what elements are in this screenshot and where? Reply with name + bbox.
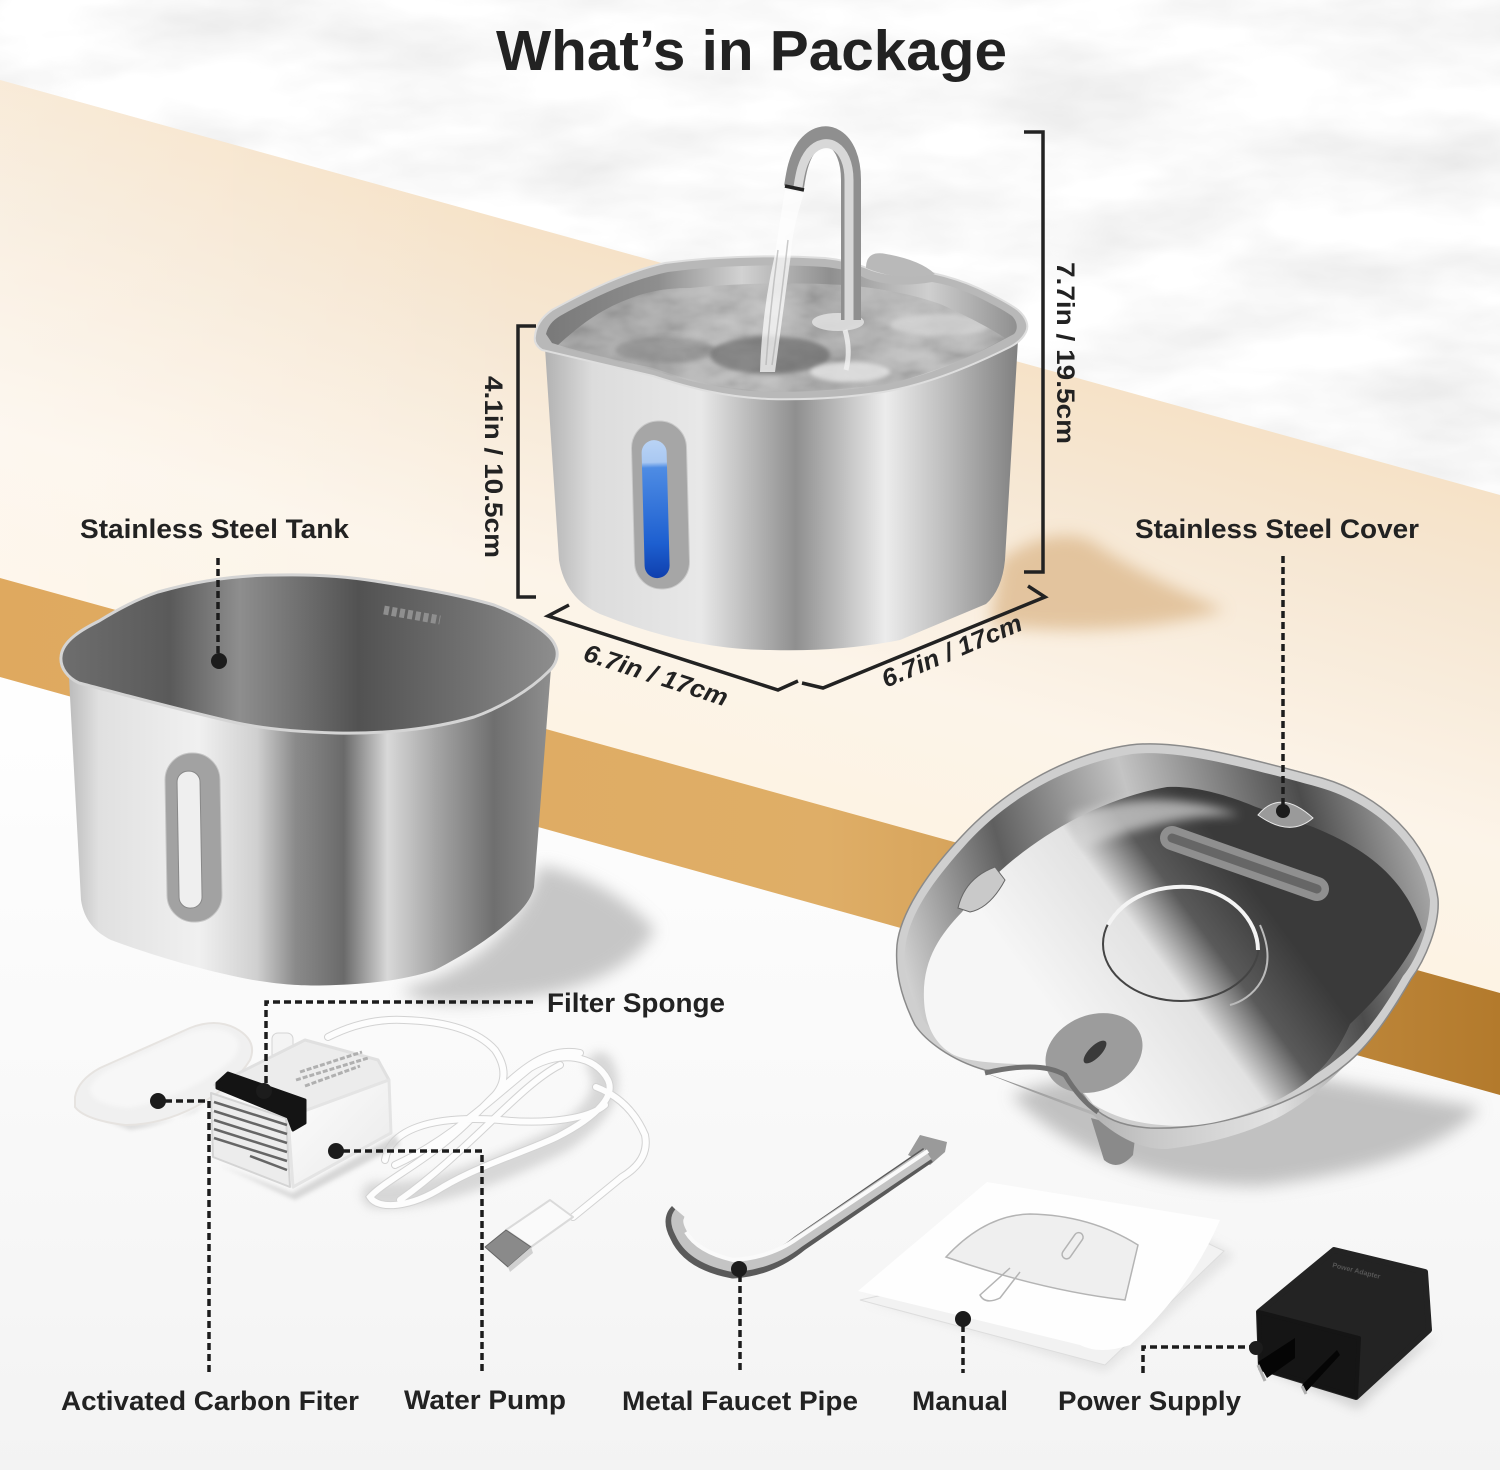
dimension: depth: 6.7in / 17cm xyxy=(580,639,731,712)
callout: water pump xyxy=(328,1143,566,1415)
level window xyxy=(631,420,690,590)
faucet xyxy=(785,136,851,320)
intake grille xyxy=(211,1093,290,1187)
title: What’s in Package xyxy=(496,19,1007,83)
background: water surface xyxy=(0,0,1500,500)
filter sponge xyxy=(217,1073,305,1130)
pump side xyxy=(288,1080,391,1187)
filter cover xyxy=(75,1023,255,1130)
water surface xyxy=(558,284,1004,392)
water pump xyxy=(211,1033,400,1200)
background: cream tabletop xyxy=(0,80,1500,1000)
assembled fountain xyxy=(535,136,1040,650)
callout: water pump: Water Pump xyxy=(404,1385,566,1415)
tank cast shadow xyxy=(400,865,655,1003)
pump cable xyxy=(328,1020,646,1217)
shadow xyxy=(1011,1070,1480,1186)
cover shell xyxy=(75,1023,252,1125)
callout: manual xyxy=(912,1311,1008,1416)
callout: metal faucet pipe xyxy=(622,1261,858,1416)
power supply adapter xyxy=(1258,1250,1436,1410)
dimension: tank height xyxy=(479,326,536,597)
pages xyxy=(860,1230,1224,1365)
fountain drawing xyxy=(946,1214,1138,1301)
dimension: depth xyxy=(548,605,798,712)
side hook xyxy=(958,867,1005,912)
cable fill xyxy=(328,1020,646,1217)
inner wall xyxy=(905,753,1430,1120)
pump top xyxy=(215,1040,389,1117)
underside xyxy=(983,1000,1400,1149)
pipe tip xyxy=(908,1135,947,1165)
embossed marks xyxy=(384,610,440,620)
callout: stainless steel tank xyxy=(80,514,350,669)
manual xyxy=(858,1182,1235,1372)
adapter front xyxy=(1259,1312,1359,1397)
adapter shadow xyxy=(1262,1335,1436,1410)
dimension: height xyxy=(1024,132,1079,572)
rear bump xyxy=(866,253,935,277)
dimension: height: 7.7in / 19.5cm xyxy=(1051,262,1079,444)
callout: stainless steel cover: Stainless Steel Cover xyxy=(1135,514,1419,544)
callout: stainless steel tank: Stainless Steel Tank xyxy=(80,514,350,544)
cover shadow xyxy=(80,1065,255,1130)
rear hook xyxy=(1258,802,1313,827)
shadow xyxy=(870,1230,1235,1372)
dimension: tank height: 4.1in / 10.5cm xyxy=(479,376,507,558)
callout: filter sponge xyxy=(256,988,725,1099)
callout: power supply: Power Supply xyxy=(1058,1386,1241,1416)
gasket bar xyxy=(1172,838,1317,889)
callout: filter sponge: Filter Sponge xyxy=(547,988,725,1018)
pump label xyxy=(296,1052,368,1086)
pump shadow xyxy=(220,1135,400,1200)
callout: metal faucet pipe: Metal Faucet Pipe xyxy=(622,1386,858,1416)
grille slots xyxy=(214,1102,287,1170)
callout: activated carbon filter: Activated Carbon Fiter xyxy=(61,1386,359,1416)
cable shadow xyxy=(375,1065,605,1195)
tank window xyxy=(165,753,222,922)
rim xyxy=(535,256,1027,399)
adapter body xyxy=(1259,1250,1429,1397)
stainless steel tank xyxy=(61,575,557,985)
adapter prongs xyxy=(1258,1338,1340,1394)
outer rim xyxy=(897,744,1438,1128)
silicone disc xyxy=(1033,999,1155,1107)
body xyxy=(545,340,1018,650)
centre circle xyxy=(1103,887,1267,1005)
tank body xyxy=(69,668,551,985)
cover dome xyxy=(90,1028,238,1108)
usb plug xyxy=(485,1200,573,1272)
callout: manual: Manual xyxy=(912,1386,1008,1416)
cable outline xyxy=(328,1020,646,1217)
callout: stainless steel cover xyxy=(1135,514,1419,818)
fountain cast shadow xyxy=(990,536,1225,630)
inner wall xyxy=(546,265,1017,391)
adapter text: Power Adapter xyxy=(1332,1262,1381,1281)
callout: power supply xyxy=(1058,1341,1263,1416)
metal faucet pipe xyxy=(674,1135,947,1270)
background: golden table edge xyxy=(0,578,1500,1095)
plate xyxy=(924,787,1422,1126)
callout: activated carbon filter xyxy=(61,1093,359,1416)
tank interior xyxy=(61,575,557,733)
leg xyxy=(1091,1118,1136,1165)
plate highlight xyxy=(1070,800,1240,850)
stainless steel cover xyxy=(897,744,1480,1186)
dimension: width: 6.7in / 17cm xyxy=(877,609,1026,694)
dimension: width xyxy=(802,586,1045,694)
nozzle xyxy=(272,1033,293,1081)
water stream xyxy=(760,190,848,372)
background: white floor xyxy=(0,640,1500,1470)
spout lip xyxy=(985,1067,1098,1112)
